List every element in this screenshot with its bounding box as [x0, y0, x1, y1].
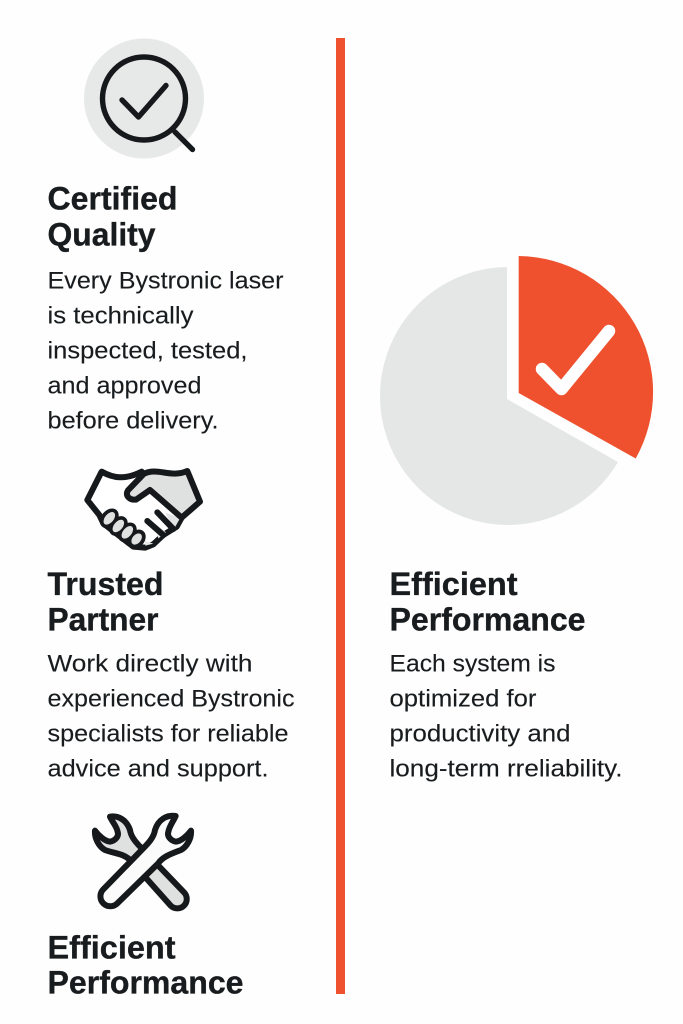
text block: certified quality description: before delivery.	[48, 408, 218, 434]
icon: crossed wrenches	[95, 816, 191, 908]
panel: efficient performance, right	[390, 566, 622, 782]
text block: certified quality description	[48, 268, 284, 434]
heading: trusted partner: Partner	[48, 602, 158, 638]
heading: efficient performance, right	[390, 566, 586, 638]
text block: certified quality description: is technically	[48, 302, 194, 330]
gray pie slice	[380, 267, 618, 525]
text block: efficient performance description: optimized for	[390, 686, 536, 712]
text block: efficient performance description: productivity and	[390, 720, 570, 748]
panel: certified quality	[48, 38, 284, 434]
heading: efficient performance, left: Performance	[48, 964, 244, 1000]
text block: certified quality description: and approved	[48, 372, 202, 400]
text block: trusted partner description: advice and support.	[48, 756, 268, 782]
panel: efficient performance, left	[48, 816, 244, 1000]
text block: trusted partner description: experienced Bystronic	[48, 686, 294, 712]
heading: efficient performance, right: Performance	[390, 602, 586, 638]
text block: trusted partner description: Work directly with	[48, 650, 252, 678]
vertical divider	[336, 38, 345, 994]
orange pie slice	[519, 256, 653, 458]
icon: magnifier with check	[84, 38, 204, 158]
pie chart with check	[380, 256, 653, 525]
heading: certified quality	[48, 180, 178, 252]
text block: trusted partner description: specialists for reliable	[48, 720, 288, 748]
heading: efficient performance, left: Efficient	[48, 930, 176, 966]
heading: certified quality: Certified	[48, 180, 178, 216]
icon: handshake	[87, 471, 200, 552]
text block: efficient performance description: Each system is	[390, 650, 556, 678]
text block: certified quality description: inspected, tested,	[48, 338, 248, 364]
panel: trusted partner	[48, 471, 294, 782]
text block: certified quality description: Every Bystronic laser	[48, 268, 284, 294]
heading: efficient performance, right: Efficient	[390, 566, 518, 602]
text block: efficient performance description: long-term rreliability.	[390, 756, 622, 782]
icon: white check	[542, 331, 609, 389]
text block: trusted partner description	[48, 650, 294, 782]
heading: certified quality: Quality	[48, 216, 156, 252]
text block: efficient performance description	[390, 650, 622, 782]
heading: trusted partner	[48, 566, 164, 638]
heading: efficient performance, left	[48, 930, 244, 1000]
heading: trusted partner: Trusted	[48, 566, 164, 602]
